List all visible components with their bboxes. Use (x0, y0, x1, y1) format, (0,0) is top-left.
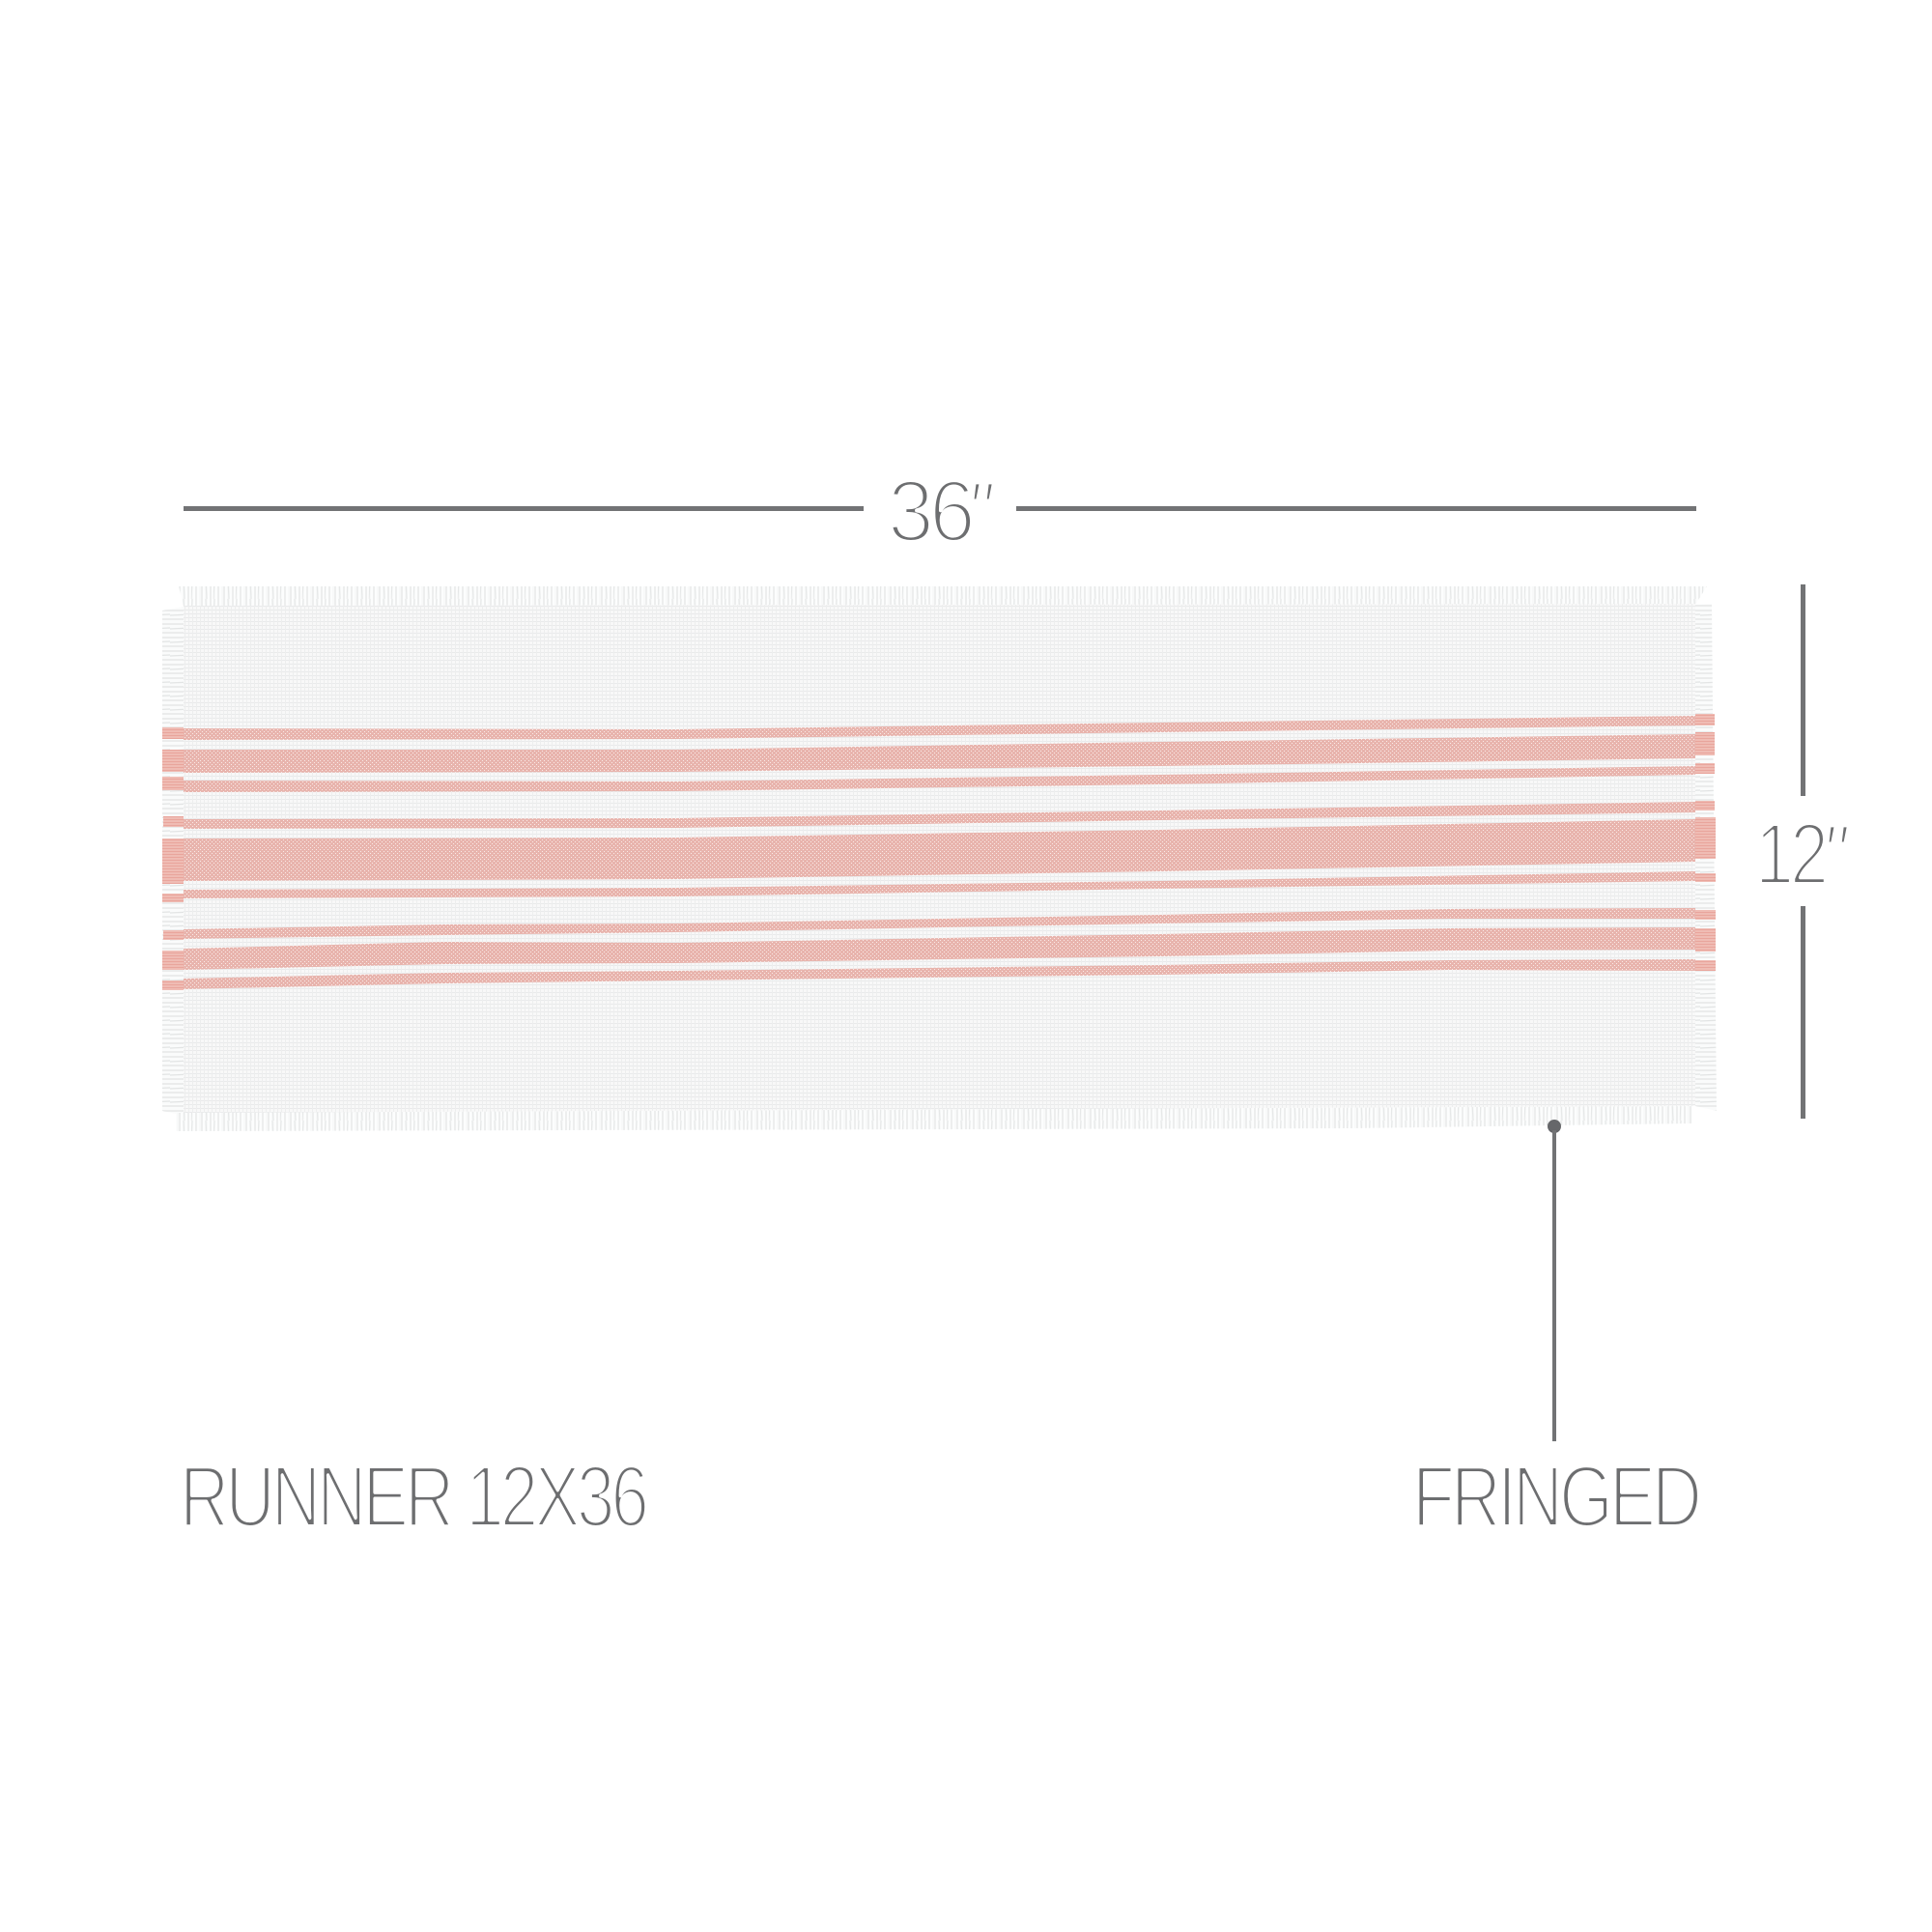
dimension: 36 inch width: " (966, 464, 994, 559)
dimension: 12 inch height: 12 (1755, 807, 1826, 903)
label: fringed: FRINGED (1412, 1449, 1699, 1546)
dimension: 12 inch height (1755, 584, 1849, 1119)
fringe: bottom edge (176, 1106, 1692, 1131)
pink stripes (184, 716, 1695, 989)
label: runner size: RUNNER 12X36 (180, 1449, 647, 1546)
fringe: right edge (1695, 604, 1717, 1111)
pink fringe: left end (162, 727, 184, 990)
dimension: 36 inch width: 36 (888, 464, 973, 560)
callout: fringed pointer (1548, 1120, 1561, 1441)
fringe: left edge (162, 607, 184, 1114)
table runner (162, 586, 1717, 1131)
cloth body (184, 604, 1695, 1113)
pink fringe: right end (1695, 714, 1716, 971)
dimension: 36 inch width (184, 464, 1696, 560)
fringe: top edge (179, 586, 1707, 607)
dimension: 12 inch height: " (1821, 807, 1849, 902)
